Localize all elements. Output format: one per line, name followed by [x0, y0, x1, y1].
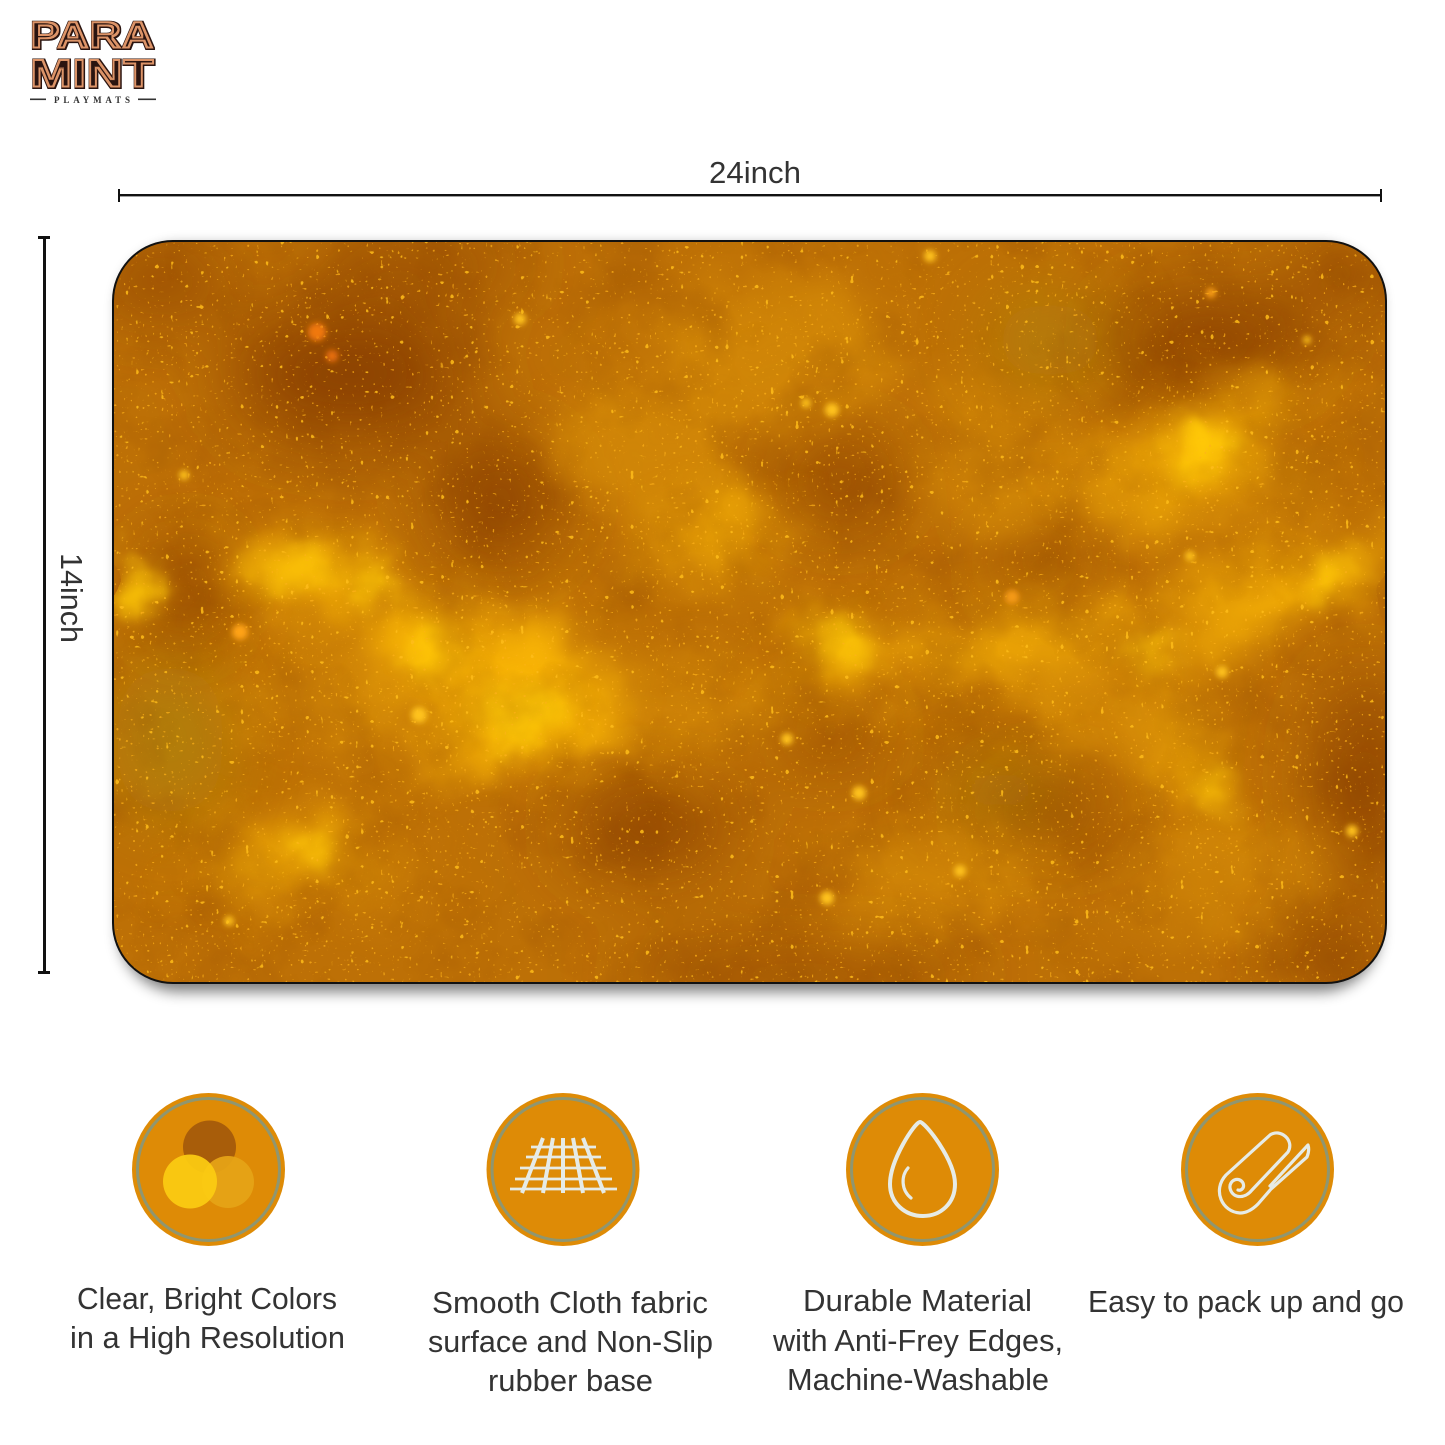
height dimension: 14inch: [38, 236, 89, 974]
dark brown nebula regions: [90, 240, 1405, 993]
feature: easy to pack: Easy to pack up and go: [1088, 1284, 1404, 1319]
icon: overlapping color circles: [132, 1093, 285, 1246]
feature: durable material: with Anti-Frey Edges,: [772, 1323, 1063, 1358]
soft orange-gold glow: [218, 271, 1340, 956]
feature: durable material: Machine-Washable: [787, 1362, 1049, 1397]
height dimension: 14inch: 14inch: [54, 553, 89, 643]
width dimension: 24inch: 24inch: [709, 155, 801, 190]
large glowing stars: [179, 250, 1358, 926]
hottest cloud cores: [114, 404, 1376, 878]
feature: smooth cloth fabric: [428, 1093, 713, 1398]
feature: easy to pack: [1088, 1093, 1404, 1319]
feature: bright colors: in a High Resolution: [70, 1320, 345, 1355]
feature: bright colors: Clear, Bright Colors: [77, 1281, 337, 1316]
playmat: golden nebula artwork: [90, 240, 1405, 993]
feature: smooth cloth fabric: Smooth Cloth fabric: [432, 1285, 708, 1320]
logo: Paramint Playmats: PARA: [30, 15, 154, 57]
logo: Paramint Playmats: MINT: [30, 52, 154, 96]
feature: bright colors: [70, 1093, 345, 1355]
icon: woven fabric grid: [486, 1093, 640, 1246]
star speckle: [113, 241, 1386, 983]
feature: durable material: Durable Material: [803, 1283, 1032, 1318]
playmat shadow: [119, 246, 1380, 992]
cloud texture: [113, 241, 1386, 983]
bright yellow clouds: [214, 358, 1385, 901]
icon: rolled mat: [1181, 1093, 1334, 1246]
logo: Paramint Playmats: PLAYMATS: [54, 95, 130, 105]
icon: water drop: [846, 1093, 999, 1246]
feature: smooth cloth fabric: rubber base: [488, 1363, 653, 1398]
feature: smooth cloth fabric: surface and Non-Slip: [428, 1324, 713, 1359]
olive tinted regions: [115, 300, 1110, 820]
logo: Paramint Playmats: [30, 15, 156, 105]
feature: durable material: [772, 1093, 1063, 1397]
